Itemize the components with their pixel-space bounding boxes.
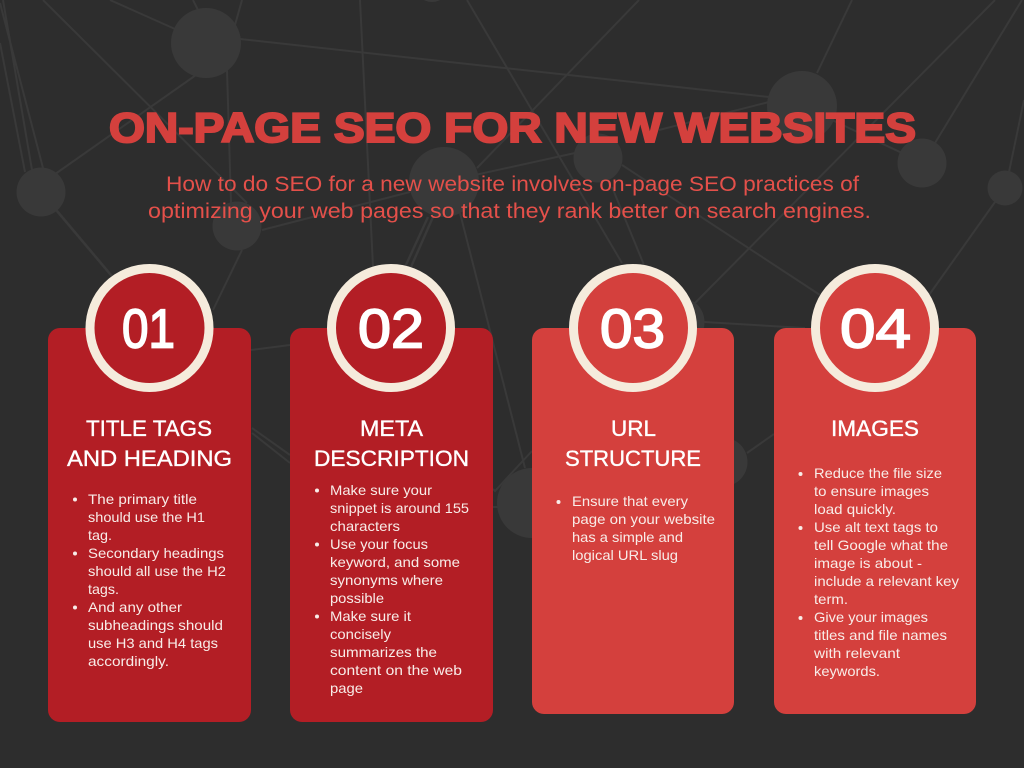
- bullet list: url structure: page on your website: [572, 512, 715, 527]
- panel: url structure: [532, 268, 734, 714]
- background network of nodes and lines: [0, 0, 1024, 538]
- bullet list: meta description: summarizes the: [330, 645, 437, 660]
- bullet list: meta description: snippet is around 155: [330, 501, 469, 516]
- bullet list: meta description: [315, 483, 469, 696]
- heading: title tags and heading: AND HEADING: [67, 446, 232, 471]
- heading: meta description: META: [360, 416, 423, 441]
- subtitle: How to do SEO for a new website involves on-page SEO practices of: [166, 173, 859, 196]
- bullet list: meta description: synonyms where: [330, 573, 443, 588]
- bullet list: images: Give your images: [814, 610, 928, 625]
- subtitle: optimizing your web pages so that they rank better on search engines.: [148, 200, 871, 223]
- bullet list: title tags: use H3 and H4 tags: [88, 636, 218, 651]
- number badge 04: [816, 268, 934, 388]
- heading: url structure: URL: [611, 416, 656, 441]
- heading: meta description: [314, 416, 469, 471]
- bullet list: images: with relevant: [813, 646, 900, 661]
- bullet list: meta description: Use your focus: [330, 537, 428, 552]
- bullet list: meta description: Make sure your: [330, 483, 433, 498]
- number badge 02: [332, 268, 450, 388]
- bullet list: meta description: Make sure it: [330, 609, 411, 624]
- number badge 01: [90, 268, 209, 388]
- bullet list: images: keywords.: [814, 664, 880, 679]
- panel: images: [774, 268, 976, 714]
- bullet list: title tags: [73, 492, 226, 669]
- number badge 03: [574, 268, 692, 388]
- heading: meta description: DESCRIPTION: [314, 446, 469, 471]
- bullet list: title tags: Secondary headings: [88, 546, 224, 561]
- number badge 01: 01: [122, 298, 175, 360]
- bullet list: title tags: subheadings should: [88, 618, 223, 633]
- bullet list: meta description: possible: [330, 591, 384, 606]
- panel: title tags and heading: [48, 268, 251, 722]
- bullet list: images: to ensure images: [814, 484, 929, 499]
- bullet list: images: [798, 466, 959, 679]
- heading: images: IMAGES: [831, 416, 919, 441]
- bullet list: title tags: And any other: [88, 600, 183, 615]
- heading: title tags and heading: [67, 416, 232, 471]
- bullet list: title tags: should use the H1: [88, 510, 205, 525]
- panel: meta description: [290, 268, 493, 722]
- title: ON-PAGE SEO FOR NEW WEBSITES: [109, 104, 916, 151]
- number badge 03: 03: [600, 298, 665, 360]
- bullet list: url structure: Ensure that every: [572, 494, 688, 509]
- heading: url structure: [565, 416, 701, 471]
- bullet list: title tags: tag.: [88, 528, 112, 543]
- bullet list: images: Use alt text tags to: [814, 520, 938, 535]
- bullet list: meta description: content on the web: [330, 663, 462, 678]
- bullet list: images: term.: [814, 592, 848, 607]
- bullet list: images: Reduce the file size: [814, 466, 942, 481]
- bullet list: meta description: concisely: [330, 627, 391, 642]
- bullet list: meta description: characters: [330, 519, 400, 534]
- bullet list: images: tell Google what the: [814, 538, 948, 553]
- bullet list: title tags: should all use the H2: [88, 564, 226, 579]
- bullet list: title tags: accordingly.: [88, 654, 169, 669]
- number badge 04: 04: [840, 298, 911, 360]
- bullet list: title tags: The primary title: [88, 492, 197, 507]
- heading: title tags and heading: TITLE TAGS: [86, 416, 212, 441]
- number badge 02: 02: [358, 298, 424, 360]
- bullet list: url structure: [556, 494, 715, 563]
- bullet list: images: include a relevant key: [814, 574, 959, 589]
- bullet list: url structure: logical URL slug: [572, 548, 678, 563]
- bullet list: meta description: page: [330, 681, 363, 696]
- heading: url structure: STRUCTURE: [565, 446, 701, 471]
- subtitle: [148, 173, 871, 223]
- bullet list: url structure: has a simple and: [572, 530, 683, 545]
- bullet list: meta description: keyword, and some: [330, 555, 460, 570]
- bullet list: images: load quickly.: [814, 502, 896, 517]
- bullet list: images: image is about -: [814, 556, 922, 571]
- bullet list: title tags: tags.: [88, 582, 119, 597]
- bullet list: images: titles and file names: [814, 628, 947, 643]
